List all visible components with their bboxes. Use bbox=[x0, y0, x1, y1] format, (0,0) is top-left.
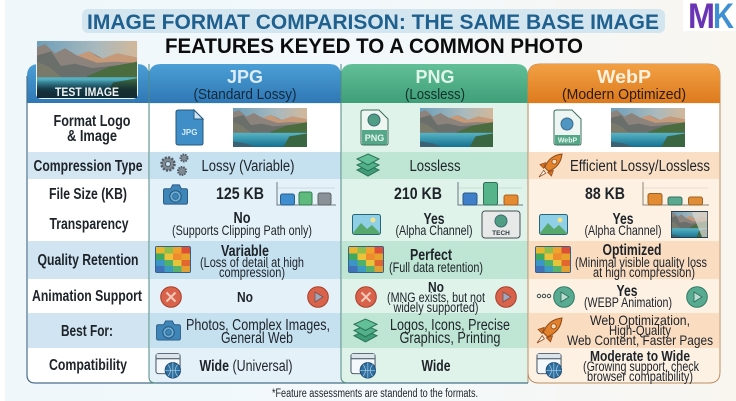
icon: rocket bbox=[539, 154, 562, 177]
icon: colour mosaic bbox=[535, 246, 571, 273]
logo: MK bbox=[683, 0, 736, 36]
transparency value: (Alpha Channel) bbox=[584, 222, 662, 238]
footnote: *Feature assessments are standend to the formats. bbox=[272, 388, 478, 400]
icon: camera bbox=[157, 321, 180, 340]
compatibility value: (Growing support, check bbox=[583, 359, 699, 374]
icon: no animation bbox=[161, 287, 181, 307]
transparency value: Yes bbox=[612, 211, 634, 228]
best for value: General Web bbox=[221, 330, 293, 347]
test image card: TEST IMAGE bbox=[55, 87, 119, 99]
icon: rocket bbox=[537, 318, 562, 343]
quality value: (Minimal visible quality loss bbox=[575, 255, 707, 270]
compression value: Lossless bbox=[410, 158, 461, 175]
row label: animation support: Animation Support bbox=[32, 288, 142, 305]
icon: landscape bbox=[352, 214, 380, 234]
compatibility value: browser compatibility) bbox=[587, 369, 693, 384]
compatibility value: Moderate to Wide bbox=[590, 348, 690, 365]
icon: stack bbox=[354, 319, 377, 342]
icon: browser globe bbox=[351, 353, 376, 378]
WebP photo bbox=[611, 108, 685, 147]
transparency value bbox=[172, 210, 312, 238]
test image card bbox=[36, 40, 138, 99]
bar chart: JPG file size bbox=[277, 182, 336, 205]
transparency value: No bbox=[234, 210, 250, 227]
panel: JPG column bbox=[149, 64, 341, 383]
quality value: Optimized bbox=[602, 242, 662, 259]
animation value bbox=[387, 279, 485, 315]
PNG heading: PNG bbox=[416, 67, 454, 87]
quality value: Variable bbox=[221, 243, 269, 260]
quality value bbox=[575, 242, 707, 280]
row label: compatibility: Compatibility bbox=[49, 357, 127, 374]
file size value: 88 KB bbox=[585, 184, 625, 203]
row label: transparency: Transparency bbox=[50, 216, 129, 233]
row label: format logo bbox=[54, 113, 130, 145]
icon: animation frames bbox=[537, 287, 574, 307]
bar chart: PNG file size bbox=[458, 182, 523, 205]
compression value: Lossy (Variable) bbox=[202, 158, 294, 175]
row label: best for: Best For: bbox=[61, 323, 113, 340]
row label: format logo: & Image bbox=[67, 128, 117, 145]
icon: PNG file bbox=[361, 110, 388, 145]
row label: format logo: Format Logo bbox=[54, 113, 130, 130]
quality value bbox=[200, 243, 304, 280]
panel: row labels bbox=[27, 64, 149, 383]
PNG heading bbox=[405, 67, 465, 103]
best for value: Photos, Complex Images, bbox=[186, 317, 330, 334]
best for value bbox=[567, 312, 713, 348]
animation value: (MNG exists, but not bbox=[387, 290, 485, 305]
panel: PNG column bbox=[341, 64, 528, 383]
icon: JPG file bbox=[176, 110, 203, 145]
icon: tech badge bbox=[482, 211, 520, 238]
icon: browser globe bbox=[156, 353, 181, 378]
JPG heading: (Standard Lossy) bbox=[194, 86, 296, 103]
icon: gears bbox=[162, 154, 188, 175]
JPG heading bbox=[194, 67, 296, 103]
file size value: 125 KB bbox=[216, 184, 264, 203]
best for value: Web Content, Faster Pages bbox=[567, 332, 713, 348]
row label: quality retention: Quality Retention bbox=[38, 252, 138, 269]
animation value: No bbox=[237, 289, 253, 306]
WebP heading: (Modern Optimized) bbox=[562, 86, 686, 103]
row label: file size: File Size (KB) bbox=[49, 186, 127, 203]
row label: compression type: Compression Type bbox=[34, 158, 143, 175]
subtitle: FEATURES KEYED TO A COMMON PHOTO bbox=[165, 35, 583, 58]
quality value: compression) bbox=[219, 265, 285, 280]
WebP heading: WebP bbox=[597, 67, 651, 87]
compatibility value: Wide bbox=[422, 358, 451, 375]
file size value: 210 KB bbox=[394, 184, 442, 203]
title: IMAGE FORMAT COMPARISON: THE SAME BASE IMAGE bbox=[87, 11, 659, 34]
bar chart: WebP file size bbox=[643, 182, 709, 205]
icon: JPG file: JPG bbox=[181, 128, 198, 137]
transparency value bbox=[584, 211, 662, 238]
animation value: (WEBP Animation) bbox=[584, 294, 672, 310]
best for value: Web Optimization, bbox=[590, 312, 690, 328]
quality value bbox=[389, 247, 483, 275]
animation value: Yes bbox=[616, 283, 638, 300]
animation value: widely supported) bbox=[393, 300, 478, 315]
quality value: (Loss of detail at high bbox=[200, 255, 304, 270]
icon: play bbox=[687, 287, 707, 307]
icon: PNG file: PNG bbox=[365, 133, 384, 143]
icon: camera bbox=[163, 185, 188, 204]
compatibility value bbox=[583, 348, 699, 384]
icon: no animation bbox=[356, 287, 376, 307]
quality value: at high compression) bbox=[593, 265, 695, 280]
best for value bbox=[390, 317, 510, 347]
icon: play bbox=[308, 287, 328, 307]
table outline bbox=[27, 76, 528, 383]
icon: landscape bbox=[540, 214, 568, 234]
JPG heading: JPG bbox=[227, 67, 263, 87]
transparency value: Yes bbox=[424, 211, 444, 228]
quality value: Perfect bbox=[410, 247, 452, 264]
icon: WebP file bbox=[554, 110, 581, 145]
best for value: Logos, Icons, Precise bbox=[390, 317, 510, 334]
best for value: High-Quality bbox=[609, 322, 671, 338]
compression value: Efficient Lossy/Lossless bbox=[570, 158, 710, 175]
transparency value: (Supports Clipping Path only) bbox=[172, 222, 312, 238]
icon: colour mosaic bbox=[155, 246, 191, 273]
PNG heading: (Lossless) bbox=[405, 86, 465, 103]
best for value bbox=[186, 317, 330, 347]
PNG photo bbox=[420, 108, 493, 147]
icon: transparent photo bbox=[671, 211, 708, 238]
icon: WebP file: WebP bbox=[558, 138, 577, 144]
WebP heading bbox=[562, 67, 686, 103]
icon: stack bbox=[357, 154, 379, 176]
icon: colour mosaic bbox=[348, 246, 384, 273]
JPG photo bbox=[233, 108, 307, 147]
icon: browser globe bbox=[537, 353, 562, 378]
quality value: (Full data retention) bbox=[389, 259, 483, 275]
icon: play bbox=[496, 287, 516, 307]
best for value: Graphics, Printing bbox=[400, 330, 500, 347]
compatibility value: Wide (Universal) bbox=[200, 358, 292, 375]
animation value bbox=[584, 283, 672, 310]
panel: WebP column bbox=[528, 64, 720, 384]
transparency value: (Alpha Channel) bbox=[396, 222, 472, 238]
transparency value bbox=[396, 211, 472, 238]
animation value: No bbox=[428, 279, 444, 296]
icon: tech badge: TECH bbox=[492, 230, 510, 237]
